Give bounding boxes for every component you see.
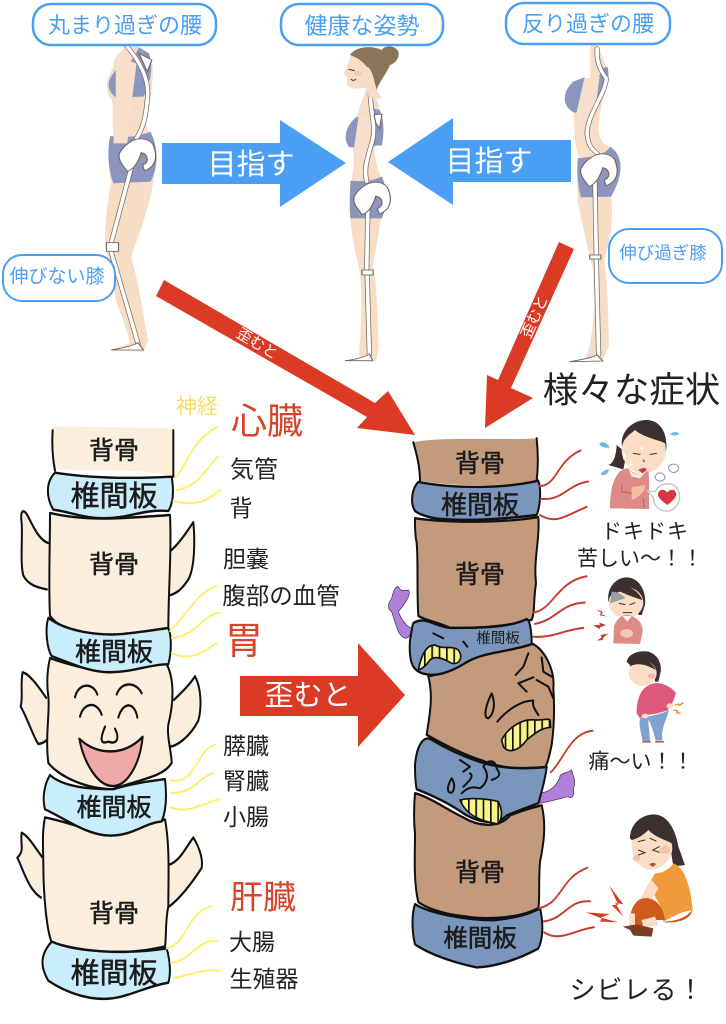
panel: healthy spine: 背骨 (89, 437, 139, 465)
nerves: yellow lines (167, 427, 220, 978)
text: organ labels: 腹部の血管 (222, 583, 340, 609)
arrow: big red distort: 歪むと (264, 680, 352, 712)
text: organ labels: 膵臓 (223, 733, 269, 759)
text: organ labels: 胃 (225, 621, 263, 663)
text: organ labels (176, 396, 340, 992)
text: pounding chest: ドキドキ (601, 520, 689, 544)
arrow: big red distort (240, 643, 405, 747)
label: healthy posture: 健康な姿勢 (304, 12, 420, 38)
label: overextended knee (609, 229, 722, 283)
label: rounded back (33, 4, 216, 45)
text: numbness: シビレる！ (569, 975, 705, 1005)
nerves: red lines (533, 450, 594, 936)
label: rounded back: 丸まり過ぎの腰 (48, 13, 202, 38)
text: organ labels: 小腸 (223, 804, 269, 830)
text: organ labels: 背 (230, 495, 252, 521)
arrow: red from arched back: 歪むと (518, 293, 552, 341)
text: organ labels: 肝臓 (230, 878, 296, 916)
text: organ labels: 気管 (230, 456, 278, 484)
text: organ labels: 腎臓 (223, 768, 269, 794)
icon: woman with stomach pain (593, 577, 645, 644)
text: symptoms heading: 様々な症状 (543, 370, 720, 410)
icon: woman with numb leg (586, 814, 693, 937)
panel: distorted spine: 椎間板 (443, 924, 517, 952)
text: organ labels: 胆嚢 (223, 546, 269, 572)
panel: healthy spine: 背骨 (89, 551, 139, 579)
text: organ labels: 大腸 (229, 929, 275, 955)
arrow: blue aim from left (162, 120, 346, 207)
text: pounding chest (577, 520, 703, 570)
panel: distorted spine: 椎間板 (476, 630, 520, 647)
figure: healthy posture (343, 46, 399, 362)
text: pounding chest: 苦しい〜！！ (577, 548, 703, 570)
label: healthy posture (281, 4, 443, 45)
panel: distorted spine: 背骨 (455, 859, 505, 887)
icon: woman with back pain (627, 651, 683, 743)
panel: distorted spine: 椎間板 (441, 490, 519, 520)
panel: distorted spine: 背骨 (455, 561, 505, 589)
arrow: red from rounded back: 歪むと (233, 325, 281, 363)
figure: rounded back posture (105, 45, 157, 352)
arrow: blue aim from left: 目指す (207, 148, 295, 181)
panel: healthy spine: 椎間板 (70, 957, 158, 990)
icon: woman with chest pain (599, 420, 680, 511)
text: organ labels: 神経 (176, 396, 218, 418)
panel: healthy spine: 椎間板 (75, 637, 153, 667)
text: organ labels: 生殖器 (230, 966, 298, 992)
panel: healthy spine: 椎間板 (70, 480, 158, 513)
label: overextended knee: 伸び過ぎ膝 (619, 243, 707, 263)
arrow: blue aim from right: 目指す (445, 145, 533, 178)
label: bent knee (3, 255, 115, 301)
panel: distorted spine (389, 438, 575, 967)
text: organ labels: 心臓 (231, 400, 303, 442)
label: arched back: 反り過ぎの腰 (522, 12, 654, 36)
panel: healthy spine: 背骨 (89, 900, 139, 928)
label: arched back (506, 3, 670, 44)
arrow: blue aim from right (388, 118, 571, 205)
arrow: red from arched back (485, 242, 574, 428)
panel: healthy spine: 椎間板 (76, 794, 152, 822)
figure: arched back posture (565, 45, 621, 362)
text: pain: 痛〜い！！ (588, 750, 694, 774)
panel: distorted spine: 背骨 (455, 450, 505, 478)
label: bent knee: 伸びない膝 (9, 266, 105, 288)
panel: healthy spine (17, 426, 202, 999)
arrow: red from rounded back (156, 280, 415, 435)
